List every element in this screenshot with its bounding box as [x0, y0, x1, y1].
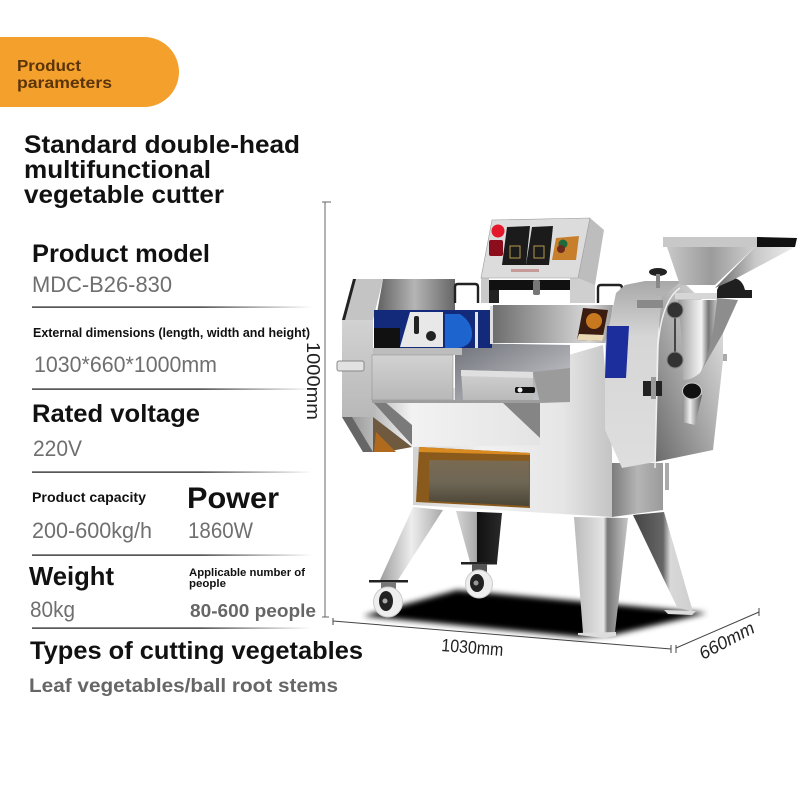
badge: product parameters: parameters [17, 75, 112, 92]
spec: product model: MDC-B26-830 [32, 272, 172, 297]
spec: product capacity: Product capacity [32, 489, 146, 505]
star knob and latch [637, 268, 667, 308]
spec: applicable number of people: Applicable number of [189, 567, 305, 579]
badge: product parameters [0, 37, 179, 107]
spec: external dimensions [33, 326, 310, 377]
spec: product model [32, 240, 210, 297]
spec: types of cutting vegetables: Types of cutting vegetables [30, 637, 363, 665]
spec: weight: 80kg [30, 597, 75, 622]
spec: applicable number of people: people [189, 578, 226, 590]
center hopper tray [455, 343, 570, 403]
spec: external dimensions: 1030*660*1000mm [34, 352, 217, 377]
dimension: width 660mm [676, 608, 759, 664]
spec: rated voltage [32, 400, 200, 461]
badge plate [577, 308, 608, 341]
observation window [416, 447, 530, 508]
badge: product parameters: Product [17, 58, 82, 75]
rear legs [456, 511, 696, 615]
spec: weight: Weight [29, 561, 114, 591]
title: Standard double-head [24, 131, 300, 159]
rear caster [461, 562, 497, 598]
spec: weight [29, 561, 114, 622]
spec: applicable number of people: 80-600 people [190, 601, 316, 621]
spec: types of cutting vegetables [29, 637, 363, 697]
door seam [655, 288, 680, 468]
front legs [380, 507, 628, 638]
left head housing [337, 279, 542, 417]
upper center wall [493, 305, 613, 343]
illustration: vegetable cutter machine [337, 218, 797, 638]
main body [413, 345, 612, 517]
tension wheels [667, 302, 683, 368]
lower left slant section [342, 402, 540, 452]
control panel [481, 218, 604, 303]
spec: power: 1860W [188, 518, 253, 543]
right head door [655, 281, 723, 462]
floor shadow [363, 590, 707, 637]
spec: types of cutting vegetables: Leaf vegetables/ball root stems [29, 676, 338, 697]
title: vegetable cutter [24, 181, 224, 209]
dimension: width 660mm: 660mm [695, 618, 758, 664]
right head left panel [605, 281, 682, 468]
front caster [369, 580, 408, 617]
blue instruction label [605, 326, 629, 378]
spec: external dimensions: External dimensions (length, width and height) [33, 326, 310, 340]
title: multifunctional [24, 156, 211, 184]
dimension: length 1030mm [333, 618, 671, 660]
side nub [723, 354, 727, 361]
dimension: height 1000mm: 1000mm [303, 342, 323, 420]
dimension: length 1030mm: 1030mm [441, 635, 504, 660]
carry handles [455, 284, 622, 303]
lower right cabinet [612, 463, 669, 517]
door lock [643, 377, 662, 399]
spec: power [187, 482, 279, 543]
spec: rated voltage: Rated voltage [32, 400, 200, 428]
hopper [663, 237, 797, 299]
dimension: height 1000mm [303, 202, 331, 617]
spec: product capacity [32, 489, 152, 543]
title [24, 131, 300, 209]
discharge spout [682, 383, 702, 425]
spec: product model: Product model [32, 240, 210, 268]
spec: power: Power [187, 482, 279, 515]
spec: rated voltage: 220V [33, 436, 82, 461]
spec: product capacity: 200-600kg/h [32, 518, 152, 543]
chute neck [678, 298, 738, 380]
spec: applicable number of people [189, 567, 316, 621]
